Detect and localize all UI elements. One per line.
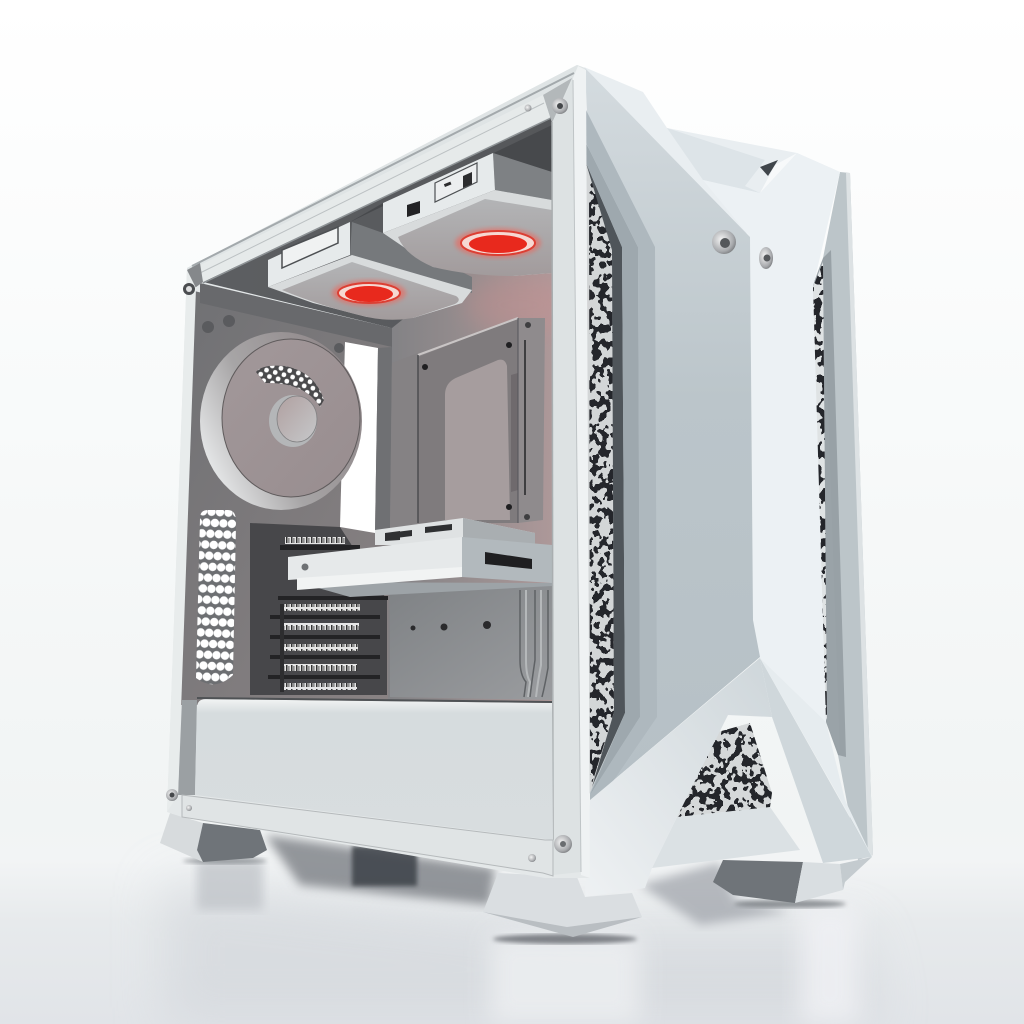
- top rear edge of front panel: [584, 67, 840, 240]
- fan mesh slot: [256, 366, 324, 407]
- top rail: [187, 65, 585, 290]
- grey side of housing: [493, 153, 552, 200]
- motherboard tray details: [410, 590, 548, 697]
- right side mesh sliver: [813, 262, 827, 720]
- rear wall plate: [170, 290, 400, 705]
- column beside gap: [375, 347, 392, 533]
- grey side of housing: [350, 222, 472, 293]
- drive bay bracket: [390, 318, 545, 528]
- fan hub: [269, 395, 317, 447]
- lower mesh triangle: [677, 723, 772, 817]
- left foot: [160, 813, 267, 862]
- left frame strip: [167, 270, 196, 812]
- screws: [166, 98, 773, 862]
- PCI expansion slots: [250, 523, 388, 695]
- white gap behind case: [340, 342, 378, 533]
- ceiling fan, back: [268, 222, 472, 320]
- right side panel: [810, 172, 873, 860]
- red ring light: [332, 280, 406, 306]
- right pillar: [552, 66, 590, 878]
- ceiling fan, front: [383, 153, 552, 276]
- mesh intake strip, front left: [585, 163, 625, 795]
- lower A-frame: under-mesh panel: [652, 807, 800, 868]
- floor reflections and shadows: [165, 835, 880, 1024]
- right chamber wall: [390, 272, 552, 703]
- round fan on rear wall: [200, 332, 362, 510]
- bottom rail: [182, 795, 553, 876]
- graphics card shelf: [288, 518, 552, 597]
- hexagon vent: [196, 510, 236, 684]
- red ring light: [455, 228, 541, 258]
- cross bar: [200, 283, 392, 347]
- mid bevel band: [586, 110, 657, 815]
- main front frame: [167, 65, 590, 878]
- central grey front panel: [585, 68, 760, 800]
- lower right wall: [390, 585, 552, 700]
- power supply shroud: [195, 698, 553, 840]
- upper right white Y facet: [703, 153, 840, 722]
- slot row: [268, 545, 388, 692]
- interior cavity: [170, 118, 552, 705]
- shadowed ceiling area above fans: [350, 125, 552, 222]
- front foot: [483, 873, 642, 937]
- lower A-frame left leg: [585, 658, 772, 897]
- rear right foot: [713, 857, 872, 903]
- mesh texture: [589, 183, 614, 782]
- lower A-frame right leg: [760, 658, 872, 863]
- dark bevel band: [586, 143, 640, 795]
- red glow on chamber wall: [465, 275, 575, 335]
- ceiling: [195, 118, 552, 328]
- grey wall strip below vent: [178, 700, 197, 795]
